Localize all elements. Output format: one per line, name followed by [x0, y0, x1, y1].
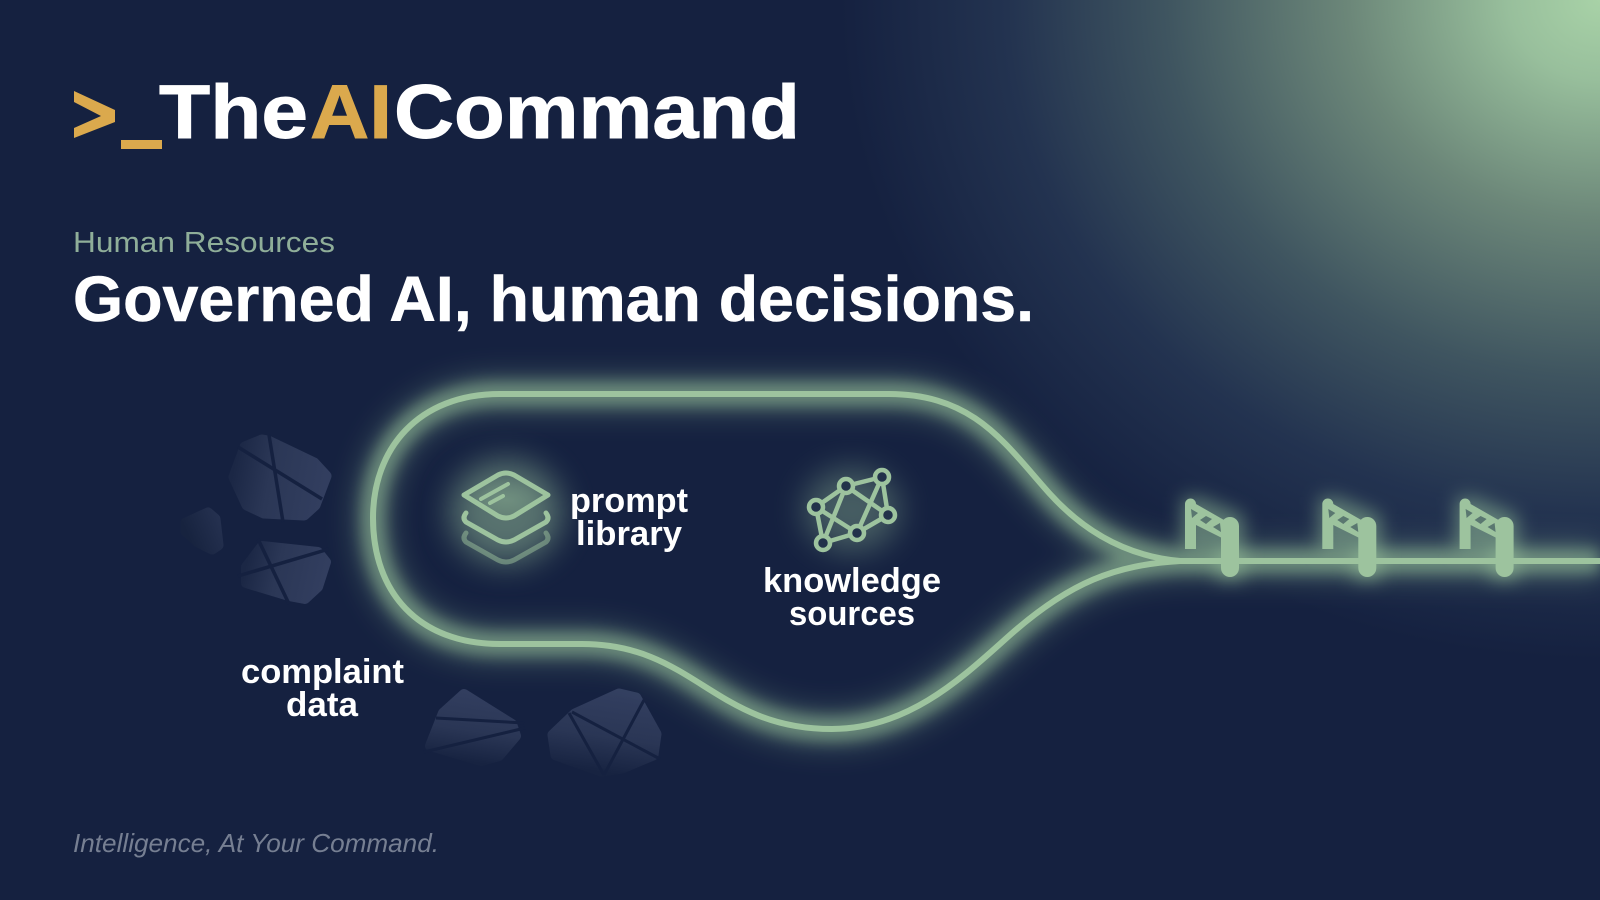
gate glow — [1182, 497, 1518, 580]
fragment: middle left stone — [238, 539, 329, 604]
gate 1 — [1185, 499, 1239, 577]
icon: layered prompt library — [450, 460, 562, 564]
tagline: Intelligence, At Your Command. — [73, 828, 439, 858]
logo word The: The — [159, 70, 308, 155]
gate 2 — [1322, 499, 1376, 577]
logo — [74, 70, 800, 155]
fragment: bottom stone two — [553, 694, 660, 775]
label: complaint data: data — [286, 686, 359, 724]
label: complaint data: complaint — [241, 653, 404, 691]
data fragments — [186, 435, 660, 775]
icon: knowledge network — [804, 468, 900, 552]
logo underscore — [121, 140, 162, 149]
funnel line and output rail — [373, 394, 1600, 729]
logo prompt chevron — [74, 91, 115, 138]
label: knowledge sources — [763, 562, 941, 633]
category label: Human Resources — [73, 227, 335, 259]
funnel wide glow — [373, 394, 1600, 729]
label: knowledge sources: knowledge — [763, 562, 941, 600]
label: prompt library — [570, 482, 688, 553]
funnel close glow — [373, 394, 1600, 729]
label: prompt library: prompt — [570, 482, 688, 520]
logo word AI: AI — [310, 70, 392, 155]
fragment: upper left stone — [234, 435, 326, 522]
gate 3 — [1460, 499, 1514, 577]
fragment: small faint stone — [186, 513, 218, 549]
headline: Governed AI, human decisions. — [73, 263, 1034, 335]
logo word Command: Command — [394, 70, 800, 155]
label: knowledge sources: sources — [789, 595, 915, 633]
label: complaint data — [241, 653, 404, 724]
fragment: bottom stone one — [424, 694, 525, 761]
label: prompt library: library — [576, 515, 682, 553]
